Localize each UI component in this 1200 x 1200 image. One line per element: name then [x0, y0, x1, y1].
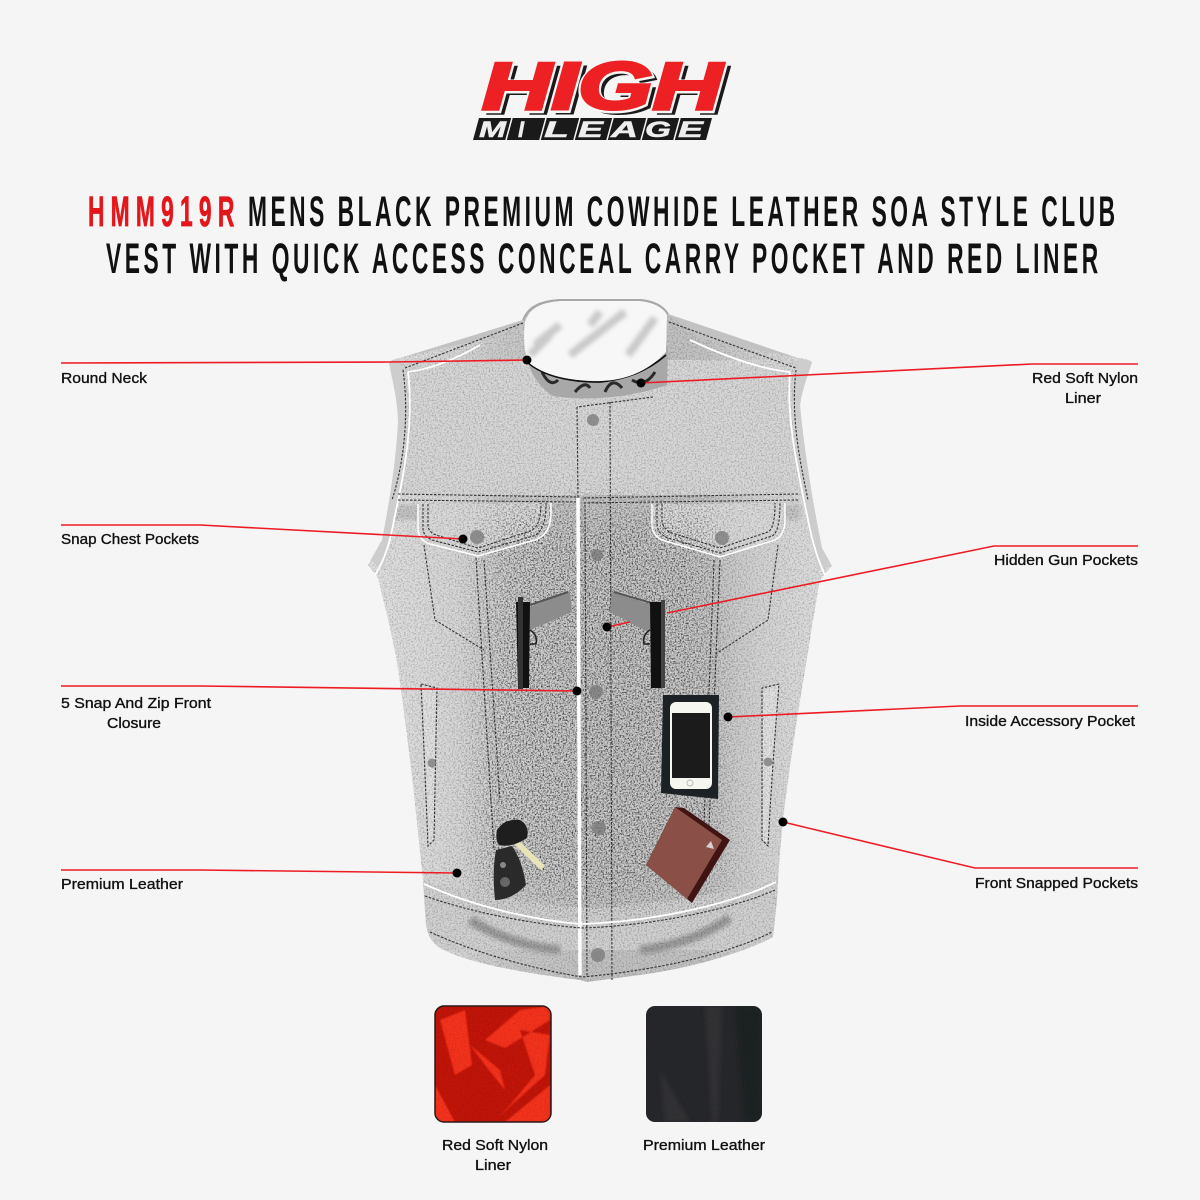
icon: phone in accessory pocket: [661, 695, 719, 799]
title: VEST WITH QUICK ACCESS CONCEAL CARRY POCKET AND RED LINER: [106, 236, 1098, 283]
icon: left gun: [516, 591, 572, 689]
icon: wallet: [646, 807, 730, 903]
placket: [577, 397, 653, 980]
swatch: black leather: [646, 1006, 762, 1122]
swatch caption: Red Soft Nylon Liner: Red Soft Nylon: [442, 1137, 548, 1154]
callout: Snap Chest Pockets: Snap Chest Pockets: [61, 531, 199, 548]
callout: Round Neck: [61, 356, 532, 387]
logo: High Mileage: HIGH: [487, 53, 729, 128]
swatch caption: Premium Leather: Premium Leather: [643, 1137, 765, 1154]
chest pocket bodies: [424, 545, 778, 850]
callout: Hidden Gun Pockets: [602, 546, 1138, 632]
logo: High Mileage: HIGH: [482, 50, 724, 125]
logo: High Mileage: M: [479, 117, 507, 142]
callout: Red Soft Nylon Liner: Red Soft Nylon: [1032, 370, 1138, 387]
callout: Red Soft Nylon Liner: [636, 364, 1138, 407]
vest: [360, 290, 840, 990]
logo: High Mileage: A: [609, 117, 638, 142]
callout: Premium Leather: [61, 868, 462, 893]
hem seam: [424, 882, 776, 924]
logo: High Mileage: G: [645, 117, 671, 142]
logo: High Mileage: I: [518, 117, 525, 142]
callout: Round Neck: Round Neck: [61, 370, 148, 387]
callout: Snap Chest Pockets: [61, 525, 468, 548]
logo: High Mileage: L: [544, 117, 569, 142]
swatch caption: Red Soft Nylon Liner: [442, 1137, 548, 1174]
callout: Red Soft Nylon Liner: Liner: [1065, 390, 1101, 407]
icon: right gun: [610, 592, 665, 688]
logo: High Mileage: E: [678, 117, 705, 142]
snaps: [587, 414, 599, 426]
logo: High Mileage: HIGH: [482, 49, 724, 124]
callout: Front Snapped Pockets: Front Snapped Pockets: [975, 875, 1138, 892]
callout: 5 Snap And Zip Front Closure: [61, 686, 582, 732]
callout: Inside Accessory Pocket: [724, 706, 1138, 730]
icon: car key: [494, 820, 543, 900]
callout: Hidden Gun Pockets: Hidden Gun Pockets: [994, 552, 1138, 569]
callout: Premium Leather: Premium Leather: [61, 876, 183, 893]
left chest pocket flap: [418, 503, 551, 556]
collar inner lining: [523, 300, 668, 398]
callout: 5 Snap And Zip Front Closure: Closure: [107, 715, 161, 732]
title: MENS BLACK PREMIUM COWHIDE LEATHER SOA STYLE CLUB: [248, 189, 1115, 236]
callout: 5 Snap And Zip Front Closure: 5 Snap And Zip Front: [61, 695, 212, 712]
title: HMM919R: [88, 189, 234, 236]
vest stitching and seams: [375, 322, 825, 980]
swatch: red nylon: [435, 1006, 551, 1122]
vest body: [360, 290, 840, 990]
logo: High Mileage: E: [578, 117, 605, 142]
swatch caption: Red Soft Nylon Liner: Liner: [475, 1157, 511, 1174]
callout: Front Snapped Pockets: [778, 818, 1138, 892]
right chest pocket flap: [652, 503, 785, 557]
title: [88, 189, 1115, 283]
callout: Inside Accessory Pocket: Inside Accessory Pocket: [965, 713, 1136, 730]
side pockets: [421, 684, 779, 846]
logo: High Mileage: [473, 49, 729, 142]
